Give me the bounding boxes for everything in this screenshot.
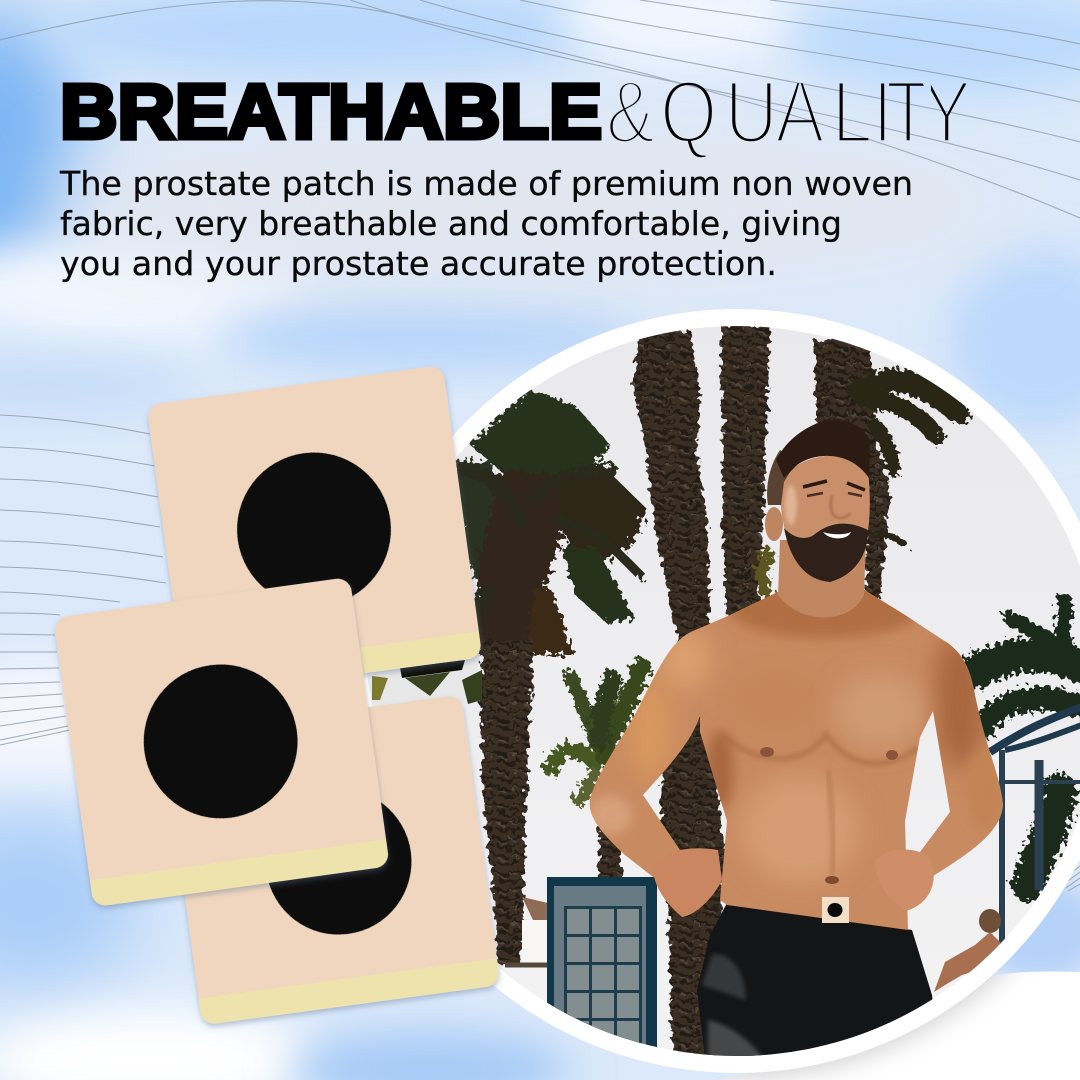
- photo: distant person: [934, 909, 1003, 992]
- runner: face: [780, 456, 870, 577]
- runner: body silhouette: [590, 589, 1003, 930]
- photo strip visible between patches: [366, 654, 482, 706]
- runner: beard: [784, 524, 868, 582]
- runner: hair: [776, 420, 870, 478]
- photo: right palm: [975, 602, 1080, 885]
- runner: body shading: [588, 582, 1003, 885]
- description text: The prostate patch is made of premium non woven: [59, 164, 913, 203]
- photo: second trunk: [720, 325, 770, 625]
- patch: front dot: [134, 655, 307, 828]
- patch: bottom: [163, 695, 501, 1025]
- runner: shorts: [697, 904, 932, 1056]
- runner: smile: [823, 532, 851, 538]
- photo: background palms: [452, 325, 1080, 1060]
- runner: nose shadow: [831, 495, 850, 518]
- photo: top right fronds: [762, 381, 958, 590]
- photo: left palm fronds: [452, 388, 648, 655]
- white corner shape bottom right: [720, 972, 1080, 1080]
- runner: mini patch: [822, 897, 849, 923]
- photo: building: [522, 897, 548, 920]
- runner: neck: [778, 540, 866, 618]
- runner: eyes: [807, 493, 862, 496]
- patch: front: [54, 577, 390, 907]
- photo: fence: [505, 962, 548, 968]
- patch: top dot: [227, 443, 401, 616]
- patch: bottom dot: [256, 779, 421, 944]
- photo: metal railing: [990, 704, 1080, 945]
- photo: exercise sign board: [547, 877, 657, 1051]
- description text: you and your prostate accurate protection.: [60, 244, 777, 283]
- runner: nipples: [760, 747, 774, 757]
- decorative wave lines: top right: [0, 0, 1080, 218]
- photo: small palm: [550, 668, 642, 800]
- photo: sky: [360, 320, 1080, 1070]
- description text: fabric, very breathable and comfortable, giving: [60, 204, 842, 243]
- patch: top: [146, 365, 482, 697]
- runner: ear: [765, 507, 783, 541]
- title: [62, 82, 966, 158]
- decorative wave lines: left: [0, 415, 166, 745]
- photo: third trunk: [815, 340, 890, 600]
- runner: left fist: [653, 848, 722, 917]
- description text: [59, 164, 913, 283]
- photo: main trunk: [633, 330, 727, 1060]
- photo: runner: [588, 420, 1003, 1070]
- circular photo of runner: [360, 320, 1080, 1070]
- runner: side hair: [767, 450, 790, 505]
- title: thin words: &QUALITY: [606, 63, 971, 162]
- title: bold word: BREATHABLE: [60, 69, 602, 155]
- runner: face highlight: [785, 485, 797, 525]
- runner: right fist: [875, 850, 934, 911]
- runner: navel: [825, 876, 839, 884]
- white ring around photo: [355, 309, 1080, 1073]
- decorative wave lines: lower right: [1062, 866, 1080, 891]
- runner: brows: [803, 481, 865, 490]
- photo: left palm trunk: [480, 640, 534, 965]
